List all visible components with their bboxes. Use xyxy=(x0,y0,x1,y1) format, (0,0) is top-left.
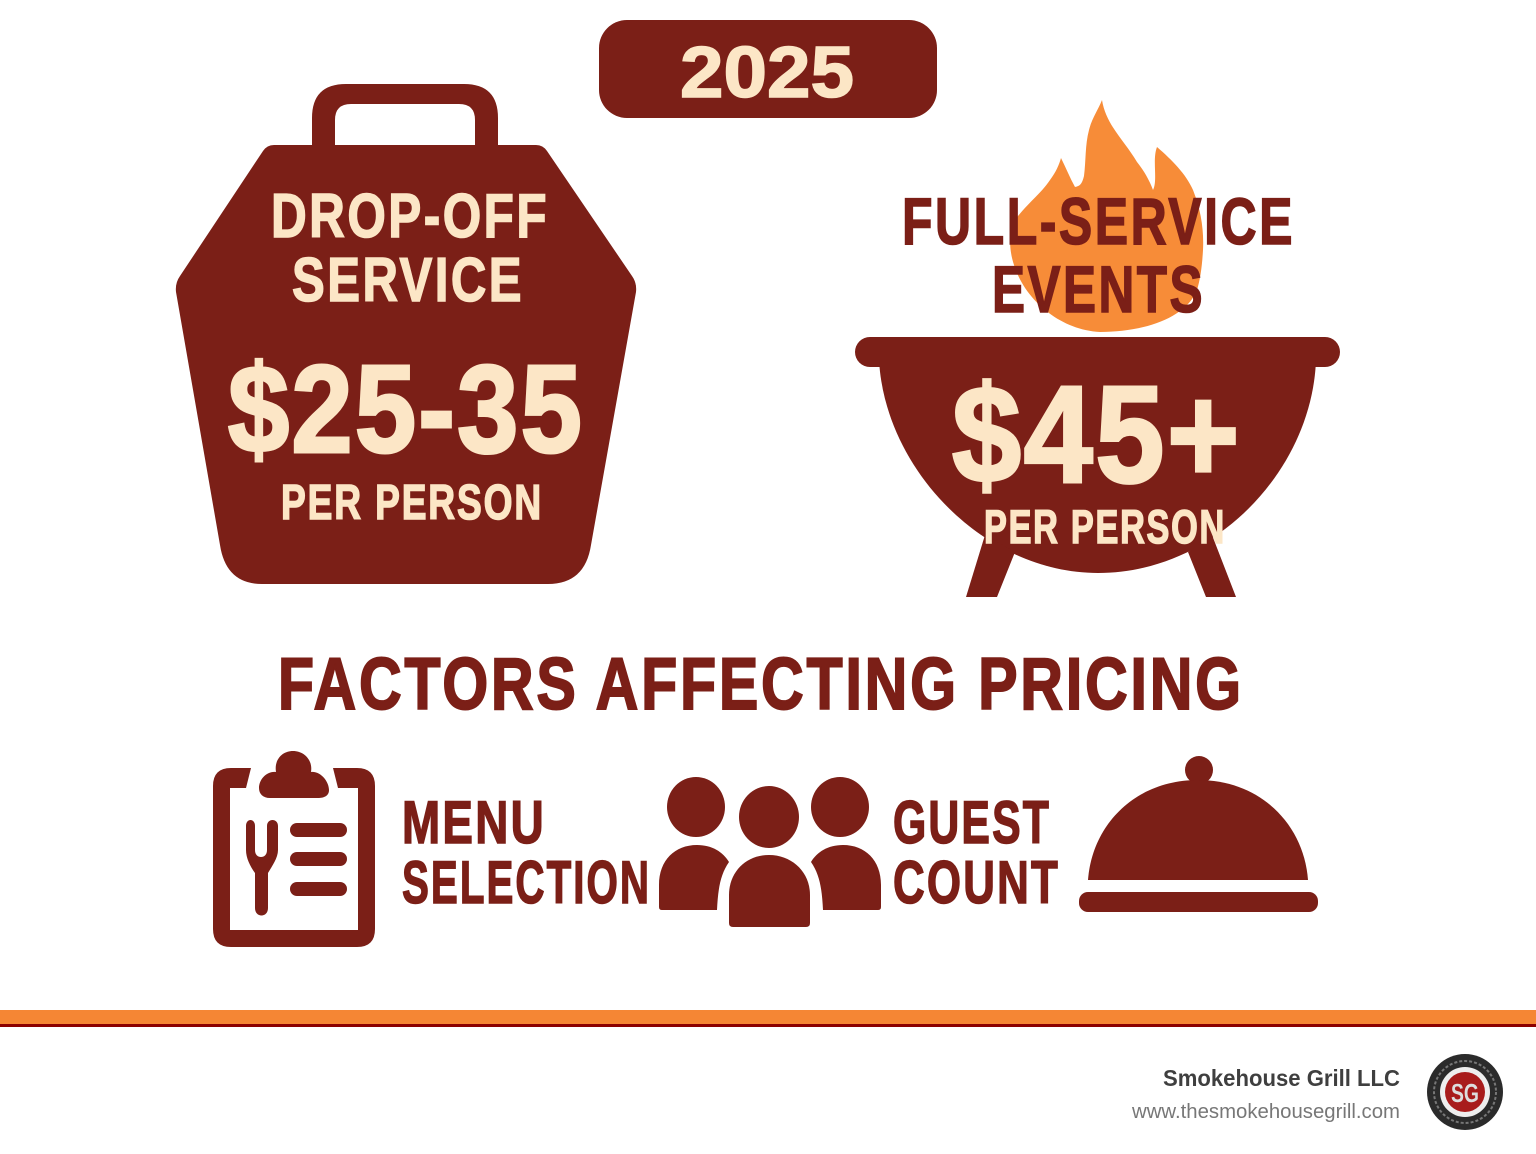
icon: catering bag xyxy=(176,84,636,584)
label: menu selection xyxy=(402,789,651,916)
icon: flame xyxy=(1010,100,1203,332)
logo: SG badge xyxy=(1427,1054,1503,1130)
heading: drop-off service: SERVICE xyxy=(292,246,524,315)
icon: guests xyxy=(659,777,881,927)
year badge: 2025 xyxy=(680,33,854,113)
label: per person: PER PERSON xyxy=(281,476,543,530)
icon: serving cloche xyxy=(1079,756,1318,912)
label: guest count xyxy=(893,789,1060,916)
year badge xyxy=(599,20,937,118)
price: $25-35: $25-35 xyxy=(228,341,584,479)
footer website: www.thesmokehousegrill.com xyxy=(1131,1101,1400,1123)
icon: grill xyxy=(855,337,1340,597)
label: guest count: COUNT xyxy=(893,849,1060,916)
icon: clipboard menu xyxy=(213,751,375,947)
label: guest count: GUEST xyxy=(893,789,1051,856)
label: per person: PER PERSON xyxy=(984,500,1226,553)
heading: factors affecting pricing: FACTORS AFFECTING PRICING xyxy=(278,644,1244,725)
label: menu selection: SELECTION xyxy=(402,849,651,916)
footer company name: Smokehouse Grill LLC xyxy=(1163,1065,1400,1091)
panel: drop-off service xyxy=(176,84,636,584)
heading: full-service events xyxy=(902,184,1295,326)
heading: full-service events: EVENTS xyxy=(992,252,1205,326)
footer rule xyxy=(0,1010,1536,1027)
label: menu selection: MENU xyxy=(402,789,546,856)
heading: drop-off service: DROP-OFF xyxy=(271,182,549,251)
heading: full-service events: FULL-SERVICE xyxy=(902,184,1295,258)
panel: full-service events xyxy=(855,100,1340,597)
price: $45+: $45+ xyxy=(952,358,1242,512)
logo: SG badge: SG xyxy=(1451,1078,1479,1108)
heading: drop-off service xyxy=(271,182,549,315)
